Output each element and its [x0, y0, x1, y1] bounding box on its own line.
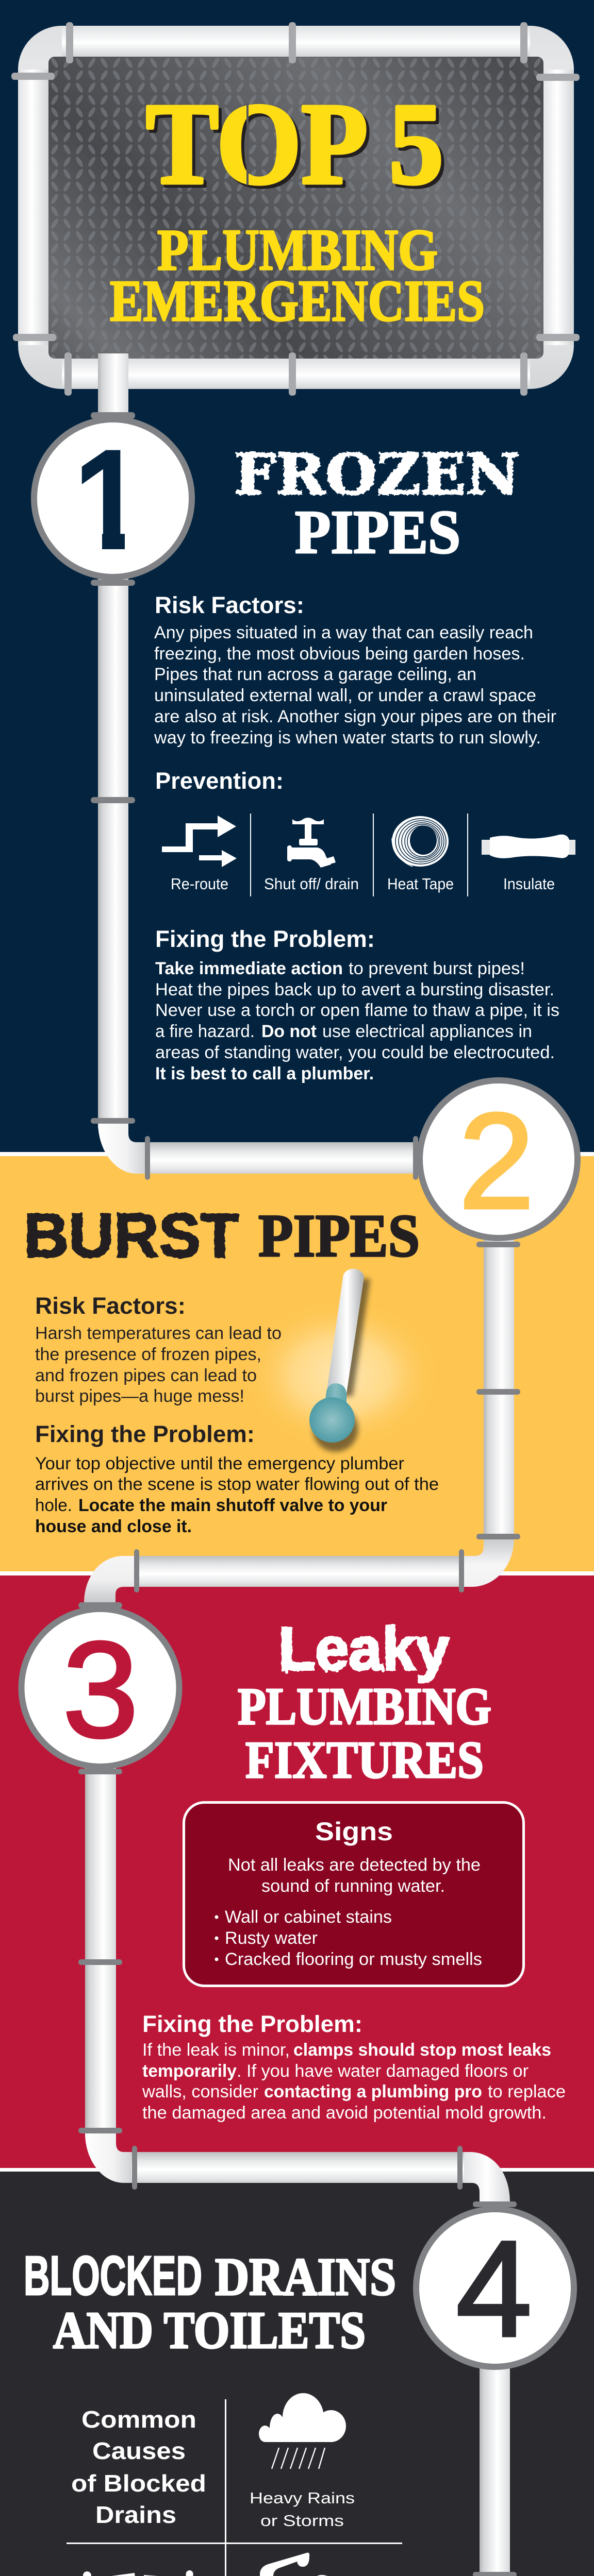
common causes heading: of Blocked — [71, 2470, 206, 2497]
signs intro — [228, 1855, 481, 1896]
fixing the problem: Never use a torch or open flame to thaw a pipe, it is — [155, 1001, 559, 1020]
number badge 1: 1 — [71, 423, 147, 576]
fixing the problem: a fire hazard. — [155, 1022, 255, 1041]
pipe network connecting the sections — [78, 353, 594, 2576]
fixing the problem: arrives on the scene is stop water flowing out of the — [35, 1475, 439, 1494]
prevention heading: Prevention: — [155, 768, 284, 794]
signs intro: Not all leaks are detected by the — [228, 1855, 481, 1875]
risk factors: burst pipes—a huge mess! — [35, 1386, 244, 1406]
heading: pipes: PIPES — [295, 498, 460, 566]
icon: insulate — [482, 835, 575, 893]
heading: plumbing fixtures — [238, 1677, 491, 1789]
heading: pipes: PIPES — [258, 1202, 420, 1269]
fixing the problem: Your top objective until the emergency plumber — [35, 1454, 404, 1473]
section 1: frozen pipes — [154, 441, 575, 1083]
heading: plumbing fixtures: FIXTURES — [245, 1731, 484, 1789]
risk factors: and frozen pipes can lead to — [35, 1366, 257, 1385]
fixing the problem: . If you have water damaged floors or — [237, 2061, 529, 2081]
risk factors: are also at risk. Another sign your pipes are on their — [154, 707, 556, 726]
fixing the problem: walls, consider — [142, 2082, 258, 2102]
signs intro: sound of running water. — [261, 1876, 445, 1896]
title: top 5: TOP 5 — [146, 79, 443, 208]
causes grid lines — [67, 2399, 402, 2576]
cause: heavy rains — [250, 2393, 355, 2530]
prevention dividers — [250, 814, 468, 896]
section 2: burst pipes — [24, 1200, 439, 1536]
icon: burst pipe with glow — [243, 1269, 439, 1452]
label — [250, 2489, 355, 2530]
title: plumbing emergencies: EMERGENCIES — [110, 269, 485, 333]
risk factors: Any pipes situated in a way that can easily reach — [154, 623, 533, 642]
fixing the problem: the damaged area and avoid potential mold growth. — [142, 2103, 547, 2123]
heading: frozen: FROZEN — [234, 441, 520, 507]
title plate with pipe frame — [11, 22, 580, 396]
cause: water flow issues — [252, 2553, 348, 2576]
fixing the problem: Take immediate action — [155, 959, 343, 978]
section 4: blocked drains and toilets — [24, 2244, 412, 2576]
fixing the problem: Fixing the Problem: — [142, 2011, 362, 2037]
common causes heading — [71, 2406, 206, 2528]
title: plumbing emergencies — [110, 218, 485, 333]
number badge 3 — [22, 1609, 179, 1767]
common causes heading: Common — [81, 2406, 196, 2433]
number badge 1 — [34, 419, 192, 577]
fixing the problem: Fixing the Problem: — [155, 926, 375, 952]
common causes heading: Causes — [92, 2437, 186, 2464]
fixing the problem: to prevent burst pipes! — [349, 959, 525, 978]
risk factors: freezing, the most obvious being garden hoses. — [154, 644, 525, 664]
frame clamps — [11, 22, 580, 396]
fixing the problem: Do not — [261, 1022, 317, 1041]
pipe: section 4 — [81, 2365, 517, 2576]
icon: shut off faucet: Shut off/ drain — [264, 875, 359, 893]
risk factors — [154, 592, 556, 748]
risk factors: the presence of frozen pipes, — [35, 1345, 261, 1364]
heading: blocked: BLOCKED — [24, 2244, 202, 2307]
pipe frame — [18, 26, 574, 389]
icon: rain cloud — [259, 2393, 346, 2469]
fixing the problem — [142, 2011, 566, 2123]
signs list — [214, 1907, 482, 1969]
risk factors: Pipes that run across a garage ceiling, an — [154, 665, 476, 684]
label: Heavy Rains — [250, 2489, 355, 2507]
number badge 3: 3 — [62, 1614, 139, 1766]
signs heading: Signs — [315, 1817, 393, 1846]
risk factors: Harsh temperatures can lead to — [35, 1324, 282, 1343]
prevention icons row — [162, 816, 575, 893]
panel: signs — [184, 1802, 524, 1986]
title: plumbing emergencies: PLUMBING — [157, 218, 438, 282]
number badge 4: 4 — [456, 2213, 532, 2365]
fixing the problem: If the leak is minor, — [142, 2040, 290, 2060]
common causes heading: Drains — [95, 2501, 176, 2528]
fixing the problem: temporarily — [142, 2061, 237, 2081]
fixing the problem: Locate the main shutoff valve to your — [78, 1496, 387, 1515]
icon: shut off faucet — [264, 818, 359, 893]
icon: broken pipe — [82, 2570, 193, 2576]
fixing the problem: use electrical appliances in — [322, 1022, 532, 1041]
icon: re-route arrows — [162, 816, 237, 893]
risk factors: Risk Factors: — [35, 1293, 186, 1319]
cause: broken pipes — [82, 2570, 195, 2576]
fixing the problem: contacting a plumbing pro — [264, 2082, 482, 2102]
fixing the problem: Fixing the Problem: — [35, 1421, 255, 1447]
number badge 2 — [420, 1080, 578, 1238]
signs list: Rusty water — [225, 1928, 318, 1948]
fixing the problem: It is best to call a plumber. — [155, 1064, 374, 1083]
fixing the problem: Heat the pipes back up to avert a bursting disaster. — [155, 980, 554, 999]
fixing the problem — [35, 1421, 439, 1536]
fixing the problem: clamps should stop most leaks — [293, 2040, 551, 2060]
pipe: section 3 — [78, 1767, 517, 2207]
title: top 5: TOP 5 — [149, 82, 447, 211]
fixing the problem: to replace — [488, 2082, 566, 2102]
icon: insulate: Insulate — [503, 875, 555, 893]
risk factors: Risk Factors: — [155, 592, 304, 618]
fixing the problem — [155, 926, 559, 1083]
fixing the problem: areas of standing water, you could be electrocuted. — [155, 1043, 555, 1062]
heading: plumbing fixtures: PLUMBING — [238, 1677, 491, 1736]
fixing the problem: hole. — [35, 1496, 72, 1515]
signs list: Cracked flooring or musty smells — [225, 1950, 482, 1969]
icon: re-route arrows: Re-route — [171, 875, 228, 893]
number badge 2: 2 — [458, 1085, 535, 1238]
label: or Storms — [260, 2512, 344, 2530]
heading: leaky with drips: Leaky — [278, 1615, 449, 1683]
icon: dripping faucet — [258, 2553, 347, 2576]
heading: drains: DRAINS — [215, 2247, 396, 2307]
pipe: section 2 — [78, 1236, 520, 1608]
icon: heat tape — [387, 816, 454, 893]
risk factors: way to freezing is when water starts to run slowly. — [154, 728, 541, 748]
section 3: leaky plumbing fixtures — [142, 1615, 566, 2123]
heading: and toilets: AND TOILETS — [53, 2301, 366, 2360]
heading: burst: BURST — [24, 1200, 239, 1270]
icon: heat tape: Heat Tape — [387, 875, 454, 893]
fixing the problem: house and close it. — [35, 1517, 192, 1536]
signs list: Wall or cabinet stains — [225, 1907, 392, 1927]
diamond plate — [48, 57, 543, 359]
risk factors: uninsulated external wall, or under a crawl space — [154, 686, 536, 705]
risk factors — [35, 1293, 282, 1406]
number badge 4 — [416, 2209, 574, 2367]
pipe: section 1 — [91, 353, 428, 1180]
